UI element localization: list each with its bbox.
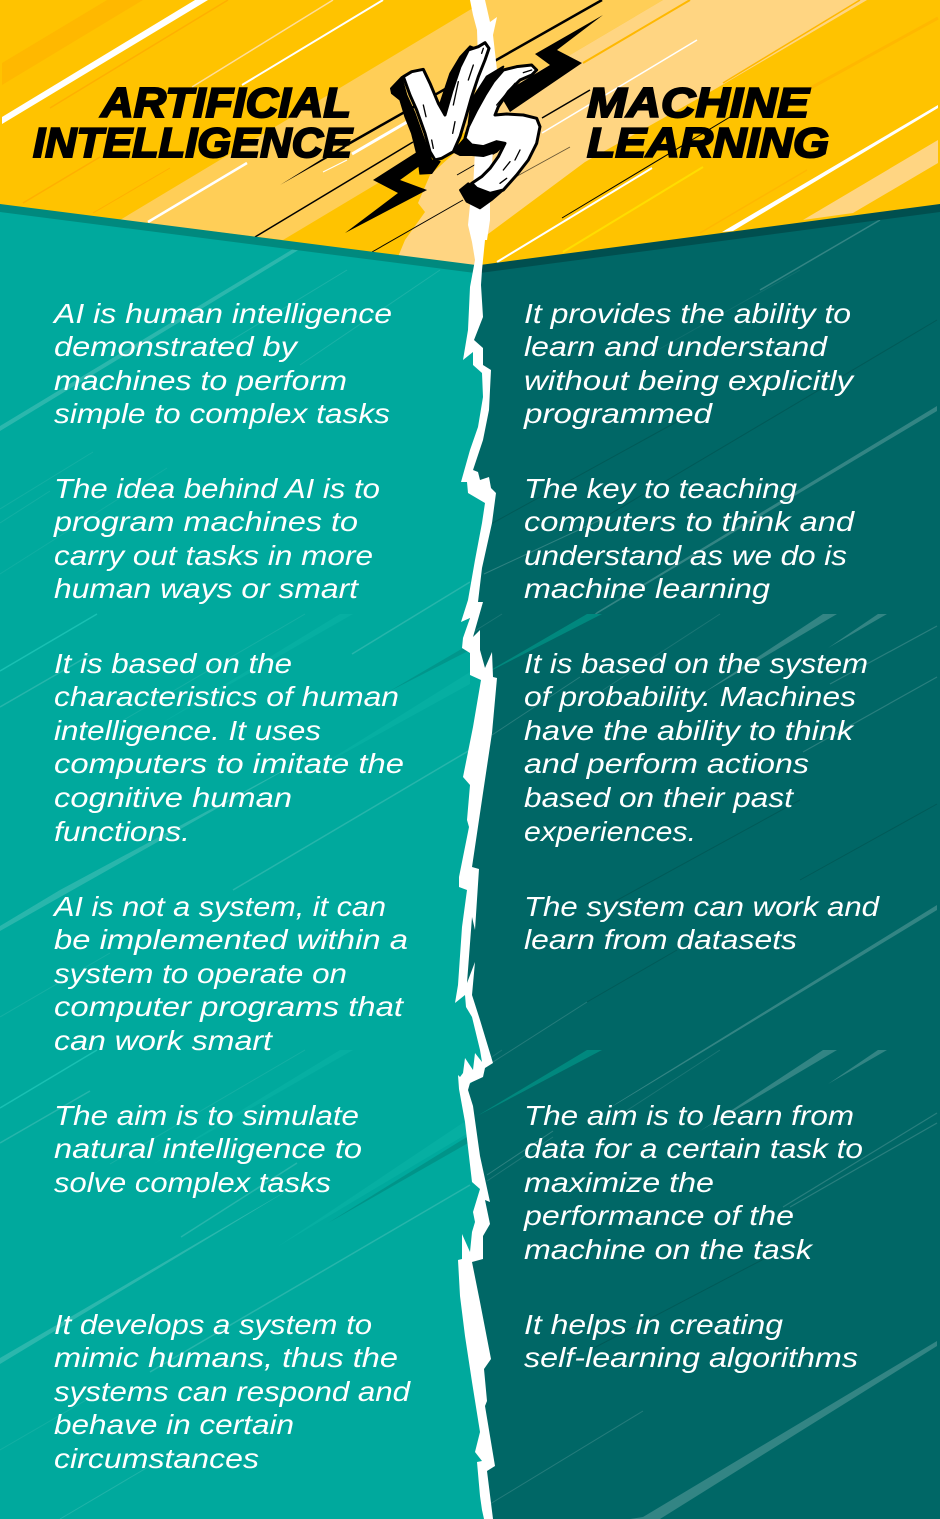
text block: ML point 5: maximize the <box>524 1167 714 1198</box>
panel: machine learning background <box>440 200 940 1519</box>
VS emblem <box>391 43 540 208</box>
text block: AI point 1: simple to complex tasks <box>54 398 390 429</box>
text block: ML point 4 <box>524 891 881 955</box>
speed lines behind VS <box>255 0 730 252</box>
text block: ML point 5: machine on the task <box>524 1234 814 1265</box>
text block: AI point 4: be implemented within a <box>54 924 408 955</box>
text block: AI point 6: It develops a system to <box>54 1309 372 1340</box>
text block: AI point 6 <box>54 1309 412 1474</box>
text block: AI point 5: natural intelligence to <box>54 1133 362 1164</box>
text block: AI point 3: functions. <box>54 816 190 847</box>
letter V <box>391 43 489 174</box>
text block: AI point 2: human ways or smart <box>54 573 359 604</box>
text block: AI point 4 <box>52 891 408 1056</box>
text block: ML point 2: understand as we do is <box>524 540 847 571</box>
text block: ML point 4: learn from datasets <box>524 924 797 955</box>
text block: ML point 5: performance of the <box>523 1200 794 1231</box>
text block: ML point 5 <box>523 1100 863 1265</box>
text block: ML point 2: The key to teaching <box>524 473 797 504</box>
text block: ML point 2 <box>524 473 856 604</box>
panel: artificial intelligence background <box>0 200 500 1519</box>
text block: ML point 6 <box>524 1309 858 1373</box>
text block: AI point 3: cognitive human <box>54 782 292 813</box>
text block: AI point 3: It is based on the <box>54 648 292 679</box>
text block: ML point 1 <box>523 298 855 429</box>
text block: ML point 3: experiences. <box>524 816 696 847</box>
text block: ML point 3: based on their past <box>524 782 794 813</box>
text block: AI point 1: AI is human intelligence <box>52 298 392 329</box>
text block: AI point 2: carry out tasks in more <box>54 540 373 571</box>
text block: ML point 3: and perform actions <box>524 748 809 779</box>
text block: ML point 3 <box>524 648 868 847</box>
text block: ML point 1: learn and understand <box>524 331 829 362</box>
text block: AI point 4: system to operate on <box>54 958 347 989</box>
title: machine learning: LEARNING <box>587 119 829 166</box>
title: artificial intelligence <box>33 79 354 166</box>
yellow header banner <box>0 0 940 285</box>
text block: AI point 6: circumstances <box>54 1443 259 1474</box>
text block: AI point 1 <box>52 298 392 429</box>
letter S <box>453 65 540 208</box>
title: artificial intelligence: INTELLIGENCE <box>33 119 354 166</box>
text block: AI point 2: program machines to <box>53 506 358 537</box>
text block: ML point 5: The aim is to learn from <box>524 1100 854 1131</box>
text block: AI point 4: can work smart <box>54 1025 273 1056</box>
text block: AI point 1: demonstrated by <box>54 331 299 362</box>
text block: AI point 4: computer programs that <box>54 991 404 1022</box>
text block: ML point 6: self-learning algorithms <box>524 1342 858 1373</box>
text block: ML point 3: have the ability to think <box>524 715 855 746</box>
text block: ML point 4: The system can work and <box>524 891 881 922</box>
text block: ML point 2: machine learning <box>524 573 770 604</box>
text block: AI point 6: systems can respond and <box>54 1376 412 1407</box>
text block: AI point 3: intelligence. It uses <box>54 715 321 746</box>
text block: AI point 6: behave in certain <box>54 1409 294 1440</box>
text block: AI point 2 <box>53 473 380 604</box>
title: machine learning <box>587 79 829 166</box>
text block: AI point 6: mimic humans, thus the <box>54 1342 398 1373</box>
text block: AI point 3: computers to imitate the <box>54 748 404 779</box>
white jagged crack divider <box>455 0 497 1519</box>
text block: AI point 1: machines to perform <box>54 365 347 396</box>
text block: ML point 5: data for a certain task to <box>524 1133 863 1164</box>
text block: AI point 5: The aim is to simulate <box>54 1100 359 1131</box>
text block: AI point 5: solve complex tasks <box>54 1167 331 1198</box>
text block: ML point 1: without being explicitly <box>524 365 855 396</box>
title: artificial intelligence: ARTIFICIAL <box>100 79 351 126</box>
text block: AI point 3: characteristics of human <box>54 681 399 712</box>
lightning bolt right <box>500 15 603 112</box>
text block: AI point 2: The idea behind AI is to <box>54 473 380 504</box>
title: machine learning: MACHINE <box>587 79 811 126</box>
lightning bolt left <box>345 150 435 233</box>
text block: ML point 1: programmed <box>523 398 714 429</box>
text block: AI point 4: AI is not a system, it can <box>52 891 386 922</box>
text block: AI point 5 <box>54 1100 362 1198</box>
text block: ML point 3: It is based on the system <box>524 648 868 679</box>
text block: ML point 1: It provides the ability to <box>524 298 851 329</box>
text block: ML point 3: of probability. Machines <box>524 681 856 712</box>
text block: AI point 3 <box>54 648 404 847</box>
text block: ML point 6: It helps in creating <box>524 1309 783 1340</box>
text block: ML point 2: computers to think and <box>524 506 856 537</box>
